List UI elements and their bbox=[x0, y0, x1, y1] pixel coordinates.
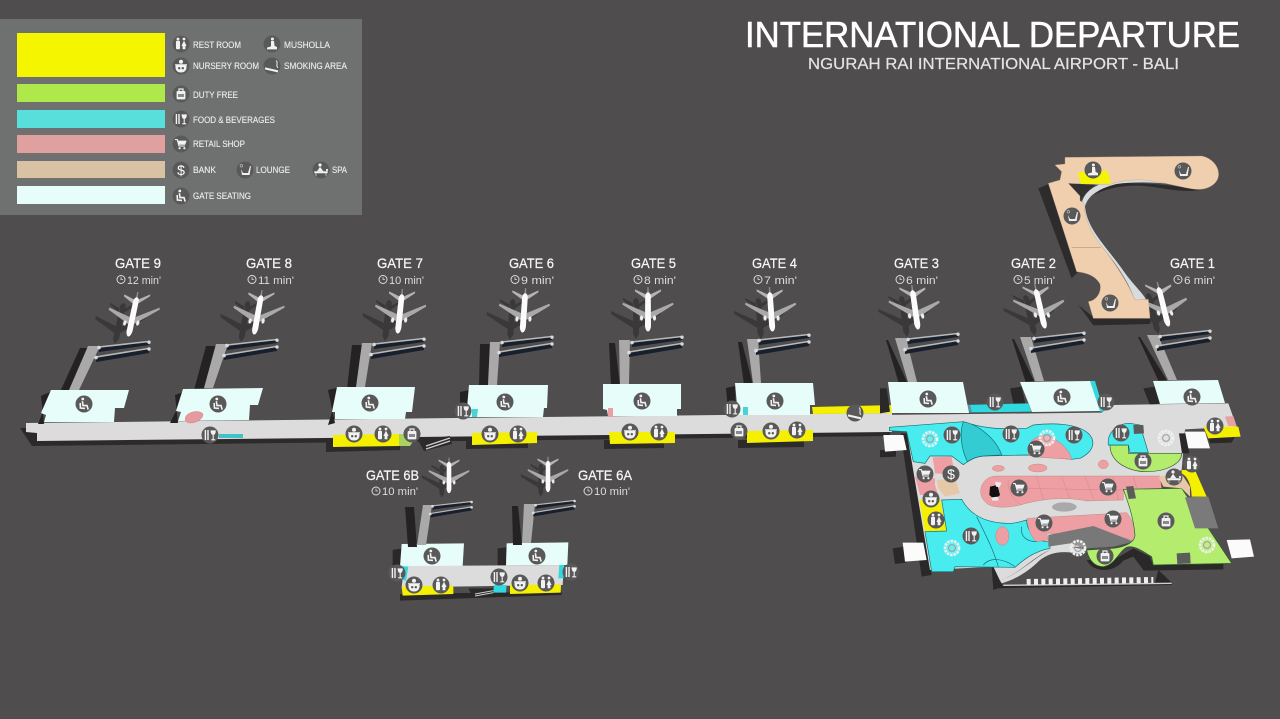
gate 6 label bbox=[509, 255, 554, 287]
icon: rest room bbox=[1206, 418, 1224, 434]
gate 2 label: GATE 2 bbox=[1011, 255, 1056, 271]
legend swatch: retail pink bbox=[17, 135, 165, 153]
grey oval bbox=[1052, 502, 1077, 512]
aircraft gate 1 bbox=[1120, 282, 1196, 334]
legend icon: retail shop bbox=[172, 136, 190, 152]
smoking area block bbox=[812, 405, 898, 414]
aircraft gate 9 bbox=[90, 292, 163, 344]
title: INTERNATIONAL DEPARTURE bbox=[745, 14, 1240, 55]
icon: rest room bbox=[788, 422, 806, 438]
big duty free green bbox=[1087, 488, 1232, 567]
rest room block 6A bbox=[510, 584, 561, 594]
legend label: smoking area: SMOKING AREA bbox=[284, 61, 348, 71]
legend swatch: yellow bbox=[17, 33, 165, 77]
retail pink west lower bbox=[915, 477, 938, 495]
gate 9 bbox=[38, 255, 163, 424]
boarding bridge gate 1 bbox=[1138, 330, 1212, 382]
icon: food bbox=[1098, 394, 1114, 410]
icon: rest room bbox=[650, 424, 668, 440]
legend label: duty free: DUTY FREE bbox=[193, 90, 238, 100]
gates 6A and 6B satellite bbox=[366, 457, 633, 601]
subtitle: NGURAH RAI INTERNATIONAL AIRPORT - BALI bbox=[808, 56, 1179, 73]
icon: bank bbox=[942, 466, 960, 482]
duty free block bbox=[399, 434, 418, 446]
boarding bridge gate 5 bbox=[609, 336, 684, 386]
south retail bbox=[1027, 513, 1135, 542]
food block bbox=[558, 565, 564, 578]
yellow block shadow bbox=[738, 440, 804, 448]
gate seating 5 bbox=[603, 384, 681, 416]
rest room yellow west bbox=[919, 498, 947, 532]
food block bbox=[472, 409, 478, 417]
cyan food area north bbox=[889, 422, 1093, 465]
spa ornament bbox=[922, 430, 938, 448]
icon: nursery bbox=[512, 574, 528, 592]
icon: food bbox=[490, 568, 508, 586]
legend icon: bank bbox=[172, 162, 190, 178]
legend label: nursery room: NURSERY ROOM bbox=[193, 61, 259, 71]
retail shop blob bbox=[185, 412, 203, 423]
legend label: gate seating: GATE SEATING bbox=[193, 191, 251, 201]
gate seating 4 bbox=[726, 383, 815, 415]
east pink bbox=[1225, 416, 1237, 426]
rest room block gate 6 bbox=[472, 432, 537, 445]
icon: food bbox=[944, 426, 960, 444]
legend swatch: food cyan bbox=[17, 110, 165, 128]
pod shadows bbox=[880, 433, 1235, 564]
gate 1 and 2 and 3 links bbox=[963, 403, 1032, 412]
gate 6 bbox=[454, 255, 554, 449]
gate 5 label: 8 min' bbox=[644, 275, 676, 287]
gate 4 label bbox=[752, 255, 797, 287]
gate 6A label: GATE 6A bbox=[578, 467, 633, 483]
icon: food bbox=[986, 394, 1004, 410]
rest room block gate 7 bbox=[333, 434, 400, 447]
gate 5 bbox=[603, 255, 684, 449]
rest room block gate 4 bbox=[747, 430, 813, 443]
legend label: lounge: LOUNGE bbox=[256, 165, 290, 175]
gate 8 label: 11 min' bbox=[258, 275, 294, 287]
icon: spa bbox=[1166, 468, 1182, 486]
lounge wing structure bbox=[1038, 156, 1219, 325]
gate 6A label: 10 min' bbox=[594, 486, 630, 498]
icon: cart bbox=[1036, 514, 1052, 532]
icon: duty free bbox=[404, 426, 420, 442]
escalator bbox=[418, 436, 452, 451]
gate 1 bbox=[1120, 255, 1225, 406]
icon: cart bbox=[916, 466, 934, 482]
legend icon: bank: $ bbox=[177, 162, 185, 178]
icon: food bbox=[962, 528, 980, 544]
legend label: bank: BANK bbox=[193, 165, 217, 175]
rest room block 6B bbox=[402, 586, 453, 596]
concourse corridor bbox=[20, 413, 892, 446]
gate seating 1 bbox=[1153, 380, 1225, 404]
icon: duty free bbox=[1158, 512, 1174, 530]
stair stripes bbox=[1003, 583, 1172, 585]
icon: cart bbox=[1104, 510, 1122, 528]
spa tan bbox=[1158, 474, 1190, 497]
spa ornament bbox=[944, 540, 960, 556]
satellite structure bbox=[393, 542, 568, 601]
main terminal bbox=[880, 381, 1254, 590]
icon: gate seating bbox=[210, 396, 226, 412]
gate 3 label: GATE 3 bbox=[894, 255, 939, 271]
icon: food bbox=[202, 426, 218, 444]
gate 4 label: GATE 4 bbox=[752, 255, 797, 271]
legend icon: smoking area bbox=[264, 58, 280, 74]
icon: cart bbox=[1100, 478, 1116, 496]
gate 9 label bbox=[115, 255, 161, 287]
icon: nursery bbox=[406, 576, 422, 594]
rest room block gate 5 bbox=[609, 432, 675, 444]
food block bbox=[402, 566, 408, 581]
aircraft gate 2 bbox=[998, 284, 1072, 336]
aircraft gate 5 bbox=[611, 287, 674, 339]
yellow block shadow bbox=[466, 440, 528, 449]
icon: gate seating bbox=[1054, 388, 1070, 406]
food block bbox=[743, 407, 748, 415]
icon: food bbox=[1066, 426, 1082, 444]
aircraft gate 6B bbox=[422, 458, 469, 498]
aircraft gate 6A bbox=[521, 457, 568, 497]
icon: cart bbox=[1010, 480, 1028, 496]
icon: nursery bbox=[762, 422, 780, 440]
icon: gate seating bbox=[1184, 388, 1200, 406]
retail pink north bbox=[1028, 435, 1072, 459]
icon: gate seating bbox=[496, 394, 514, 410]
icon: duty free bbox=[1134, 452, 1152, 470]
icon: gate seating bbox=[766, 392, 784, 410]
gate seating 8 bbox=[170, 388, 263, 423]
icon: food bbox=[1002, 426, 1020, 442]
boarding bridge gate 7 bbox=[347, 338, 426, 389]
aircraft gate 8 bbox=[216, 290, 288, 342]
gate 2 bbox=[998, 255, 1114, 412]
spa ornament bbox=[1038, 430, 1056, 446]
gate seating 6B bbox=[400, 543, 464, 567]
boarding bridge 6A bbox=[512, 500, 576, 545]
icon: rest room bbox=[538, 574, 554, 592]
gate 6B label: 10 min' bbox=[382, 486, 418, 498]
gate 3 label bbox=[894, 255, 939, 287]
gate 7 label: 10 min' bbox=[389, 275, 424, 287]
aircraft gate 3 bbox=[875, 285, 945, 337]
upper cyan bbox=[1108, 423, 1148, 453]
icon: nursery bbox=[346, 426, 362, 442]
legend icon: food and beverages bbox=[172, 110, 190, 128]
gate 3 bbox=[875, 255, 1004, 413]
boarding bridge gate 4 bbox=[738, 334, 811, 385]
gate 5 label bbox=[631, 255, 676, 287]
gate 6 label: GATE 6 bbox=[509, 255, 554, 271]
aircraft gate 4 bbox=[732, 287, 799, 339]
gate 3 label: 6 min' bbox=[906, 275, 938, 287]
food bar bbox=[219, 434, 243, 438]
gate 6 label: 9 min' bbox=[521, 275, 554, 287]
spa ornament bbox=[1158, 430, 1174, 446]
central retail island bbox=[981, 476, 1162, 507]
icon: gate seating bbox=[362, 394, 378, 412]
icon: gate seating bbox=[528, 548, 546, 564]
gate 4 bbox=[724, 255, 815, 448]
yellow rest block shadow bbox=[326, 440, 400, 452]
icon: food bbox=[1112, 424, 1130, 442]
legend icon: duty free bbox=[172, 86, 190, 102]
gate seating 2 bbox=[1020, 381, 1100, 412]
gate seating 6 bbox=[460, 385, 548, 418]
icon: bank: $ bbox=[947, 466, 955, 482]
gate 8 label: GATE 8 bbox=[246, 255, 292, 271]
gate 7 label bbox=[377, 255, 424, 287]
spa ornament bbox=[1198, 536, 1216, 554]
boarding bridge gate 9 bbox=[60, 340, 151, 392]
gate 9 label: 12 min' bbox=[127, 275, 161, 287]
boarding bridge gate 3 bbox=[886, 332, 960, 384]
legend swatch: tan bbox=[17, 161, 165, 178]
terminal base floor bbox=[880, 403, 1237, 581]
gate 7 label: GATE 7 bbox=[377, 255, 423, 271]
aircraft gate 7 bbox=[360, 289, 428, 341]
lounge wing bbox=[1038, 156, 1219, 325]
legend icon: nursery room bbox=[172, 58, 190, 74]
yellow block shadow bbox=[604, 440, 664, 449]
legend icon: musholla bbox=[264, 36, 280, 52]
legend label: retail shop: RETAIL SHOP bbox=[193, 139, 245, 149]
black sculpture bbox=[989, 485, 1000, 500]
legend swatch: gate seating bbox=[17, 186, 165, 204]
boarding bridge gate 2 bbox=[1012, 332, 1086, 383]
gate 2 label bbox=[1011, 255, 1056, 287]
legend swatch: duty free green bbox=[17, 84, 165, 102]
retail block bbox=[608, 408, 613, 417]
sculpture base bbox=[992, 482, 1002, 501]
darker lens bbox=[961, 422, 1002, 462]
icon: musholla bbox=[1084, 162, 1102, 178]
legend icon: gate seating bbox=[172, 188, 190, 204]
dark cubes bbox=[1126, 425, 1191, 564]
icon: nursery bbox=[622, 424, 638, 440]
icon: smoking bbox=[846, 404, 864, 422]
gate 6B label: GATE 6B bbox=[366, 467, 419, 483]
icon: rest room bbox=[374, 426, 392, 442]
smoking area bbox=[812, 404, 898, 422]
icon: duty free bbox=[730, 422, 748, 440]
boarding bridge 6B bbox=[405, 501, 473, 547]
gate pods bbox=[883, 432, 1254, 562]
retail pink west bbox=[933, 457, 954, 474]
icon: food bbox=[724, 400, 740, 418]
satellite floor bbox=[402, 565, 564, 587]
gate seating 3 bbox=[888, 382, 969, 413]
gate 1 label: 6 min' bbox=[1184, 275, 1215, 287]
icon: nursery bbox=[482, 426, 498, 442]
icon: food bbox=[454, 402, 472, 420]
legend icon: rest room bbox=[172, 36, 190, 52]
terminal shadows bbox=[880, 387, 1223, 590]
icon: rest room bbox=[510, 426, 526, 442]
lower curved floor bbox=[1000, 547, 1087, 583]
gate 6A label bbox=[578, 467, 633, 498]
boarding bridge gate 8 bbox=[194, 338, 279, 390]
gate 1 label bbox=[1170, 255, 1215, 287]
icon: rest room bbox=[432, 576, 450, 594]
spa ornament bbox=[1070, 540, 1086, 556]
panel: legend bbox=[0, 19, 362, 215]
retail partitions bbox=[1008, 477, 1137, 505]
aircraft gate 6 bbox=[485, 288, 551, 340]
gate 8 label bbox=[246, 255, 294, 287]
terminal floor plan bbox=[880, 381, 1254, 590]
pink ovals bbox=[992, 460, 1108, 545]
icon: nursery bbox=[922, 490, 940, 508]
gate 4 label: 7 min' bbox=[764, 275, 797, 287]
gate 2 label: 5 min' bbox=[1024, 275, 1055, 287]
bank tan bbox=[937, 478, 960, 497]
gate 5 label: GATE 5 bbox=[631, 255, 676, 271]
food block bbox=[493, 585, 507, 593]
rest room yellow east bbox=[1182, 470, 1207, 497]
legend icon: spa bbox=[312, 162, 330, 178]
icon: cart bbox=[1028, 440, 1044, 458]
south cyan details bbox=[977, 517, 1037, 567]
gate 1 label: GATE 1 bbox=[1170, 255, 1215, 271]
gate 6B label bbox=[366, 467, 419, 498]
icon: food bbox=[388, 564, 406, 582]
icon: gate seating bbox=[76, 396, 92, 412]
gate 9 label: GATE 9 bbox=[115, 255, 161, 271]
icon: rest room bbox=[1184, 456, 1200, 472]
legend icon: lounge bbox=[236, 162, 254, 178]
boarding bridge gate 6 bbox=[479, 336, 554, 387]
icon: duty free bbox=[1096, 548, 1114, 564]
icon: lounge bbox=[1064, 208, 1080, 224]
upper green bbox=[1110, 445, 1182, 472]
satellite shadows bbox=[393, 547, 562, 601]
icon: lounge bbox=[1174, 162, 1192, 180]
legend label: rest room: REST ROOM bbox=[193, 40, 241, 50]
legend label: food and beverages: FOOD & BEVERAGES bbox=[193, 115, 275, 125]
gate 8 bbox=[170, 255, 294, 444]
east rest block gate 1 bbox=[1203, 427, 1241, 438]
icon: rest room bbox=[928, 512, 944, 528]
icon: food bbox=[562, 564, 580, 580]
gate seating 7 bbox=[328, 387, 415, 425]
escalator bbox=[468, 588, 493, 597]
legend label: musholla: MUSHOLLA bbox=[284, 40, 331, 50]
gate seating 9 bbox=[38, 390, 129, 424]
service square bbox=[1185, 497, 1218, 528]
icon: gate seating bbox=[424, 548, 440, 564]
icon: lounge bbox=[1102, 294, 1118, 312]
icon: gate seating bbox=[920, 390, 936, 408]
cyan food area south bbox=[925, 499, 1050, 572]
gate 7 bbox=[326, 255, 452, 452]
legend label: spa: SPA bbox=[332, 165, 348, 175]
icon: gate seating bbox=[634, 392, 650, 410]
gate seating 6A bbox=[506, 542, 568, 565]
service area grey bbox=[1048, 526, 1134, 548]
